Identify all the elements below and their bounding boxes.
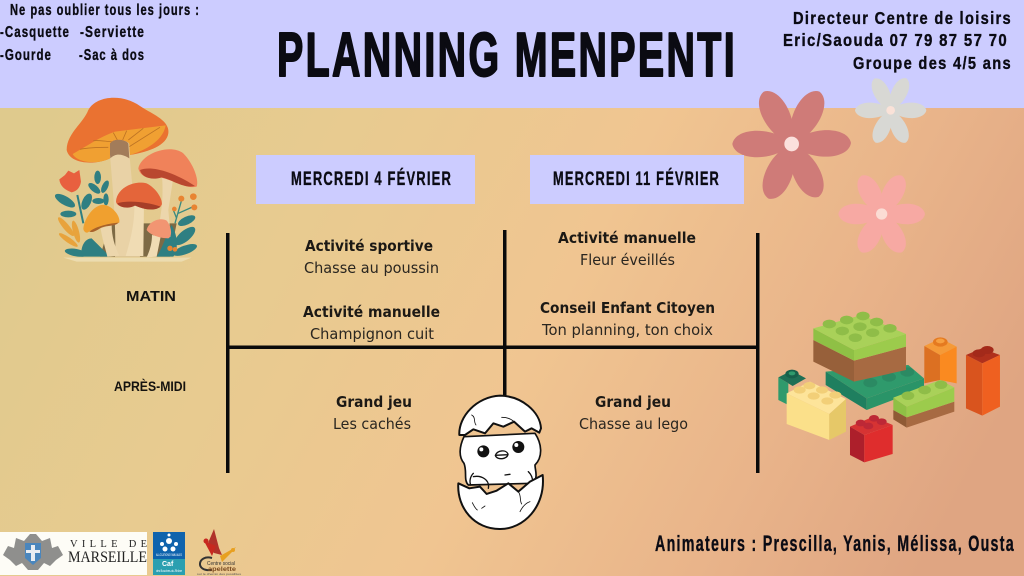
logo: ville de marseille: MARSEILLE — [68, 549, 147, 566]
logo: caf: ALLOCATIONS FAMILIALES — [156, 553, 182, 557]
logo: ville de marseille: VILLE DE — [70, 539, 147, 550]
logo: caf — [153, 532, 185, 575]
small green and brown brick — [893, 380, 954, 428]
right stem — [157, 172, 174, 237]
reminder list: Ne pas oublier tous les jours : — [10, 2, 200, 19]
contact block — [783, 8, 1012, 73]
foliage — [53, 171, 198, 258]
date box 2: MERCREDI 11 FÉVRIER — [553, 168, 720, 190]
activity: sportive — [304, 237, 439, 277]
top shell — [459, 396, 541, 435]
ground shadow — [100, 223, 177, 257]
grey flower — [855, 75, 926, 146]
activity: grand jeu 11 février: Chasse au lego — [579, 415, 688, 433]
logo: centre social capelette: apelette — [208, 567, 237, 573]
reminder list: -Gourde — [0, 47, 52, 64]
icon: lego bricks — [778, 312, 1000, 462]
yellow brick — [787, 382, 846, 440]
activity: manuelle 4 février: Activité manuelle — [303, 303, 440, 321]
logo: centre social capelette — [197, 529, 242, 576]
small pink mushroom — [147, 235, 161, 257]
title: PLANNING MENPENTI — [277, 21, 737, 90]
activity: grand jeu 11 février — [579, 393, 688, 433]
bottom shell — [458, 475, 543, 529]
red flower — [59, 170, 81, 192]
activity: grand jeu 4 février: Grand jeu — [336, 393, 412, 411]
activity: manuelle 11 février: Activité manuelle — [558, 229, 696, 247]
activity: conseil enfant citoyen: Ton planning, ton choix — [541, 321, 713, 339]
small green brick — [778, 370, 806, 405]
activity: manuelle 11 février — [558, 229, 696, 269]
orange brick — [924, 337, 957, 383]
logo: caf: Caf — [162, 561, 174, 568]
activity: grand jeu 11 février: Grand jeu — [595, 393, 671, 411]
big cap — [67, 98, 168, 163]
logo: ville de marseille — [0, 532, 147, 575]
activity: conseil enfant citoyen: Conseil Enfant Citoyen — [540, 299, 715, 317]
activity: conseil enfant citoyen — [540, 299, 715, 339]
reminder list: -Casquette — [0, 24, 70, 41]
activity: manuelle 4 février: Champignon cuit — [310, 325, 434, 343]
logo: caf: des Bouches-du-Rhône — [156, 569, 182, 573]
chick body — [460, 433, 541, 485]
red brick — [850, 415, 893, 462]
right mushroom cap — [138, 149, 197, 187]
activity: sportive: Chasse au poussin — [304, 259, 439, 277]
icon: flowers — [732, 75, 926, 257]
logo: centre social capelette: Centre social — [207, 561, 235, 567]
date box 1: MERCREDI 4 FÉVRIER — [291, 168, 452, 190]
row label: après-midi: APRÈS-MIDI — [114, 378, 186, 394]
teal plate — [826, 365, 924, 410]
large green and brown brick — [813, 312, 906, 382]
date box 1 — [256, 155, 475, 204]
date box 2 — [530, 155, 744, 204]
icon: mushrooms — [53, 98, 198, 262]
activity: manuelle 4 février — [303, 303, 440, 343]
activity: sportive: Activité sportive — [305, 237, 433, 255]
tall red-orange brick — [966, 346, 1000, 416]
icon: hatching chick — [458, 396, 543, 529]
middle mushroom — [126, 202, 144, 256]
big flower — [732, 85, 851, 204]
activity: manuelle 11 février: Fleur éveillés — [580, 251, 675, 269]
reminder list — [0, 2, 200, 64]
reminder list: -Sac à dos — [79, 47, 145, 64]
reminder list: -Serviette — [80, 24, 145, 41]
activity: grand jeu 4 février: Les cachés — [333, 415, 411, 433]
activity: grand jeu 4 février — [333, 393, 412, 433]
left mushroom — [101, 225, 119, 257]
pink flower — [838, 171, 925, 257]
logo: centre social capelette: sur le chemin des possibles — [197, 572, 242, 576]
schedule grid lines — [226, 230, 760, 473]
big stem — [109, 143, 140, 257]
row label: matin: MATIN — [126, 288, 176, 305]
eyes and beak — [477, 445, 489, 457]
